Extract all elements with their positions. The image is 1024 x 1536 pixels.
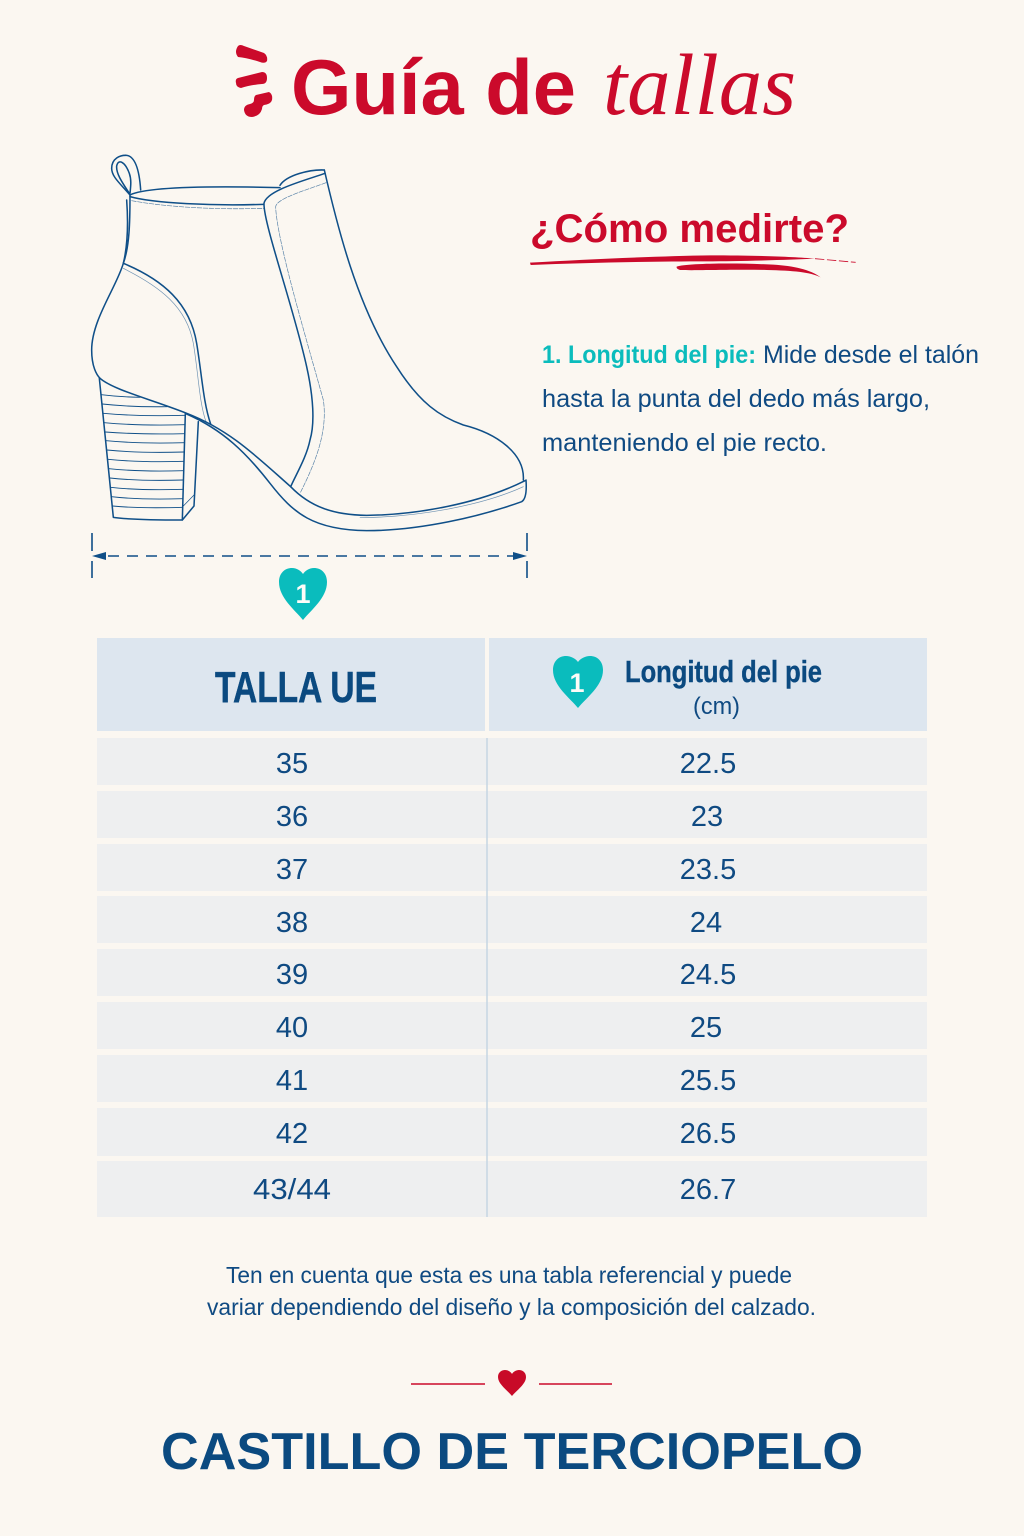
- block heel: [99, 378, 198, 520]
- footnote: variar dependiendo del diseño y la composición del calzado.: [207, 1294, 816, 1320]
- icon: teal heart 1: 1: [569, 668, 585, 698]
- size column values: 42: [276, 1118, 308, 1150]
- size column values: 43/44: [253, 1174, 331, 1206]
- foot length column values: 25.5: [680, 1065, 736, 1097]
- heel counter: [123, 263, 211, 424]
- footnote: [207, 1262, 816, 1320]
- vamp and toe: [324, 170, 523, 480]
- foot length column values: 22.5: [680, 748, 736, 780]
- marker: teal heart 1: 1: [295, 579, 311, 609]
- foot length column values: 23.5: [680, 854, 736, 886]
- heading: tallas: tallas: [603, 36, 796, 133]
- icon: red brush logo: [236, 45, 272, 117]
- table header: longitud: [489, 638, 927, 731]
- size column values: 38: [276, 907, 308, 939]
- foot length column values: 26.7: [680, 1174, 736, 1206]
- table rows: [97, 738, 927, 1217]
- foot length column values: 24: [690, 907, 722, 939]
- foot length column values: 25: [690, 1012, 722, 1044]
- pull tab loop: [112, 155, 141, 195]
- title: Guía de tallas: [236, 36, 796, 133]
- collar and ankle: [92, 187, 280, 378]
- footnote: Ten en cuenta que esta es una tabla referencial y puede: [226, 1262, 792, 1288]
- foot length column values: [680, 748, 736, 1206]
- column unit: (cm): [693, 693, 740, 720]
- instruction line 2: hasta la punta del dedo más largo,: [542, 385, 930, 413]
- foot length column values: 24.5: [680, 959, 736, 991]
- red brush underline: [530, 255, 856, 277]
- ornament: heart with lines: [411, 1370, 612, 1396]
- size column values: 36: [276, 801, 308, 833]
- table header: talla: TALLA UE: [215, 663, 377, 712]
- text block: measuring instruction: [542, 341, 979, 457]
- size column values: 35: [276, 748, 308, 780]
- heading: ¿Cómo medirte?: ¿Cómo medirte?: [530, 207, 849, 251]
- measurement arrow: foot length: [92, 533, 527, 578]
- size column values: 37: [276, 854, 308, 886]
- foot length column values: 26.5: [680, 1118, 736, 1150]
- size column values: 40: [276, 1012, 308, 1044]
- heading: ¿Cómo medirte?: [530, 207, 856, 277]
- table header: talla: [97, 638, 485, 731]
- column title: Longitud del pie: [625, 654, 822, 689]
- icon: teal heart 1: [553, 656, 603, 708]
- label: Longitud del pie: 1. Longitud del pie:: [542, 341, 756, 369]
- sole: [100, 378, 526, 531]
- size column values: 39: [276, 959, 308, 991]
- elastic gore panel: [264, 170, 326, 493]
- size column values: [253, 748, 331, 1206]
- boot illustration: [92, 155, 526, 531]
- heading: Guía de: Guía de: [291, 43, 576, 131]
- foot length column values: 23: [691, 801, 723, 833]
- brand name: CASTILLO DE TERCIOPELO: [161, 1423, 863, 1481]
- instruction line 3: manteniendo el pie recto.: [542, 429, 827, 457]
- size table: [97, 638, 927, 1217]
- size column values: 41: [276, 1065, 308, 1097]
- marker: teal heart 1: [279, 568, 327, 620]
- instruction line 1: Mide desde el talón: [763, 341, 979, 369]
